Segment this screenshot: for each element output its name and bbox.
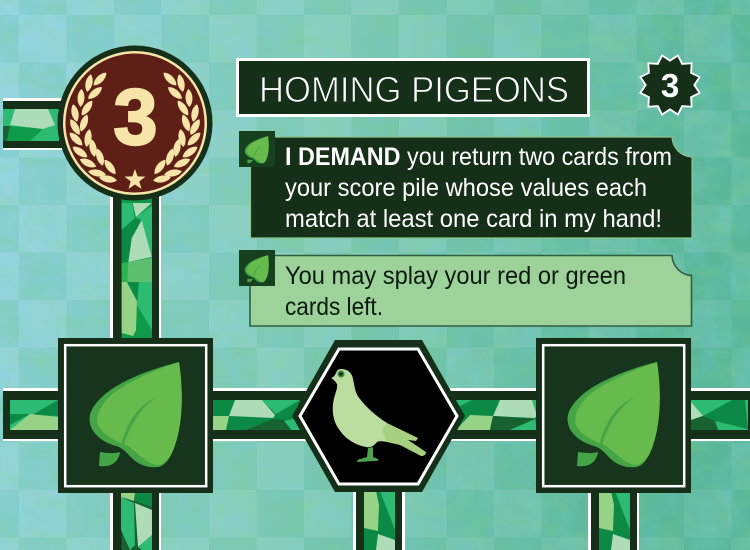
panel: demand effect	[250, 137, 692, 238]
connector: vertical stained-glass bar below hexagon	[353, 486, 405, 550]
connector: vertical stained-glass bar under medallion	[110, 195, 161, 343]
icon box: left leaf	[58, 338, 213, 493]
icon box: right leaf	[536, 338, 691, 493]
medallion: age 3 laurel badge: 3	[114, 72, 157, 161]
title: Homing Pigeons: HOMING PIGEONS	[259, 69, 569, 110]
connector: vertical stained-glass bar below left box	[110, 488, 161, 550]
connector: vertical stained-glass bar below right box	[588, 488, 639, 550]
text: demand effect	[285, 143, 672, 233]
text: demand effect: your score pile whose values each	[285, 174, 647, 202]
text: splay effect: cards left.	[285, 293, 383, 321]
badge: card value 3	[639, 54, 701, 116]
text: demand effect: I DEMAND you return two cards from	[285, 143, 672, 171]
icon box: pigeon hexagon	[292, 340, 465, 492]
badge: card value 3: 3	[661, 67, 679, 104]
icon: pigeon	[331, 369, 426, 462]
connector: horizontal stained-glass bar, left box to hexagon	[208, 388, 308, 441]
title: Homing Pigeons	[238, 60, 588, 116]
panel: splay effect	[250, 256, 692, 326]
connector: horizontal stained-glass bar, far right	[686, 388, 750, 441]
text: demand effect: match at least one card in my hand!	[285, 205, 662, 233]
icon: small leaf, demand effect	[239, 131, 275, 167]
medallion: age 3 laurel badge	[58, 46, 212, 200]
connector: horizontal stained-glass bar, far left	[3, 388, 63, 441]
connector: horizontal stained-glass bar, hexagon to right box	[450, 388, 542, 441]
icon: small leaf, splay effect	[239, 250, 275, 286]
connector: upper left stained-glass bar	[3, 98, 63, 150]
text: splay effect	[285, 262, 626, 321]
text: splay effect: You may splay your red or green	[285, 262, 626, 290]
